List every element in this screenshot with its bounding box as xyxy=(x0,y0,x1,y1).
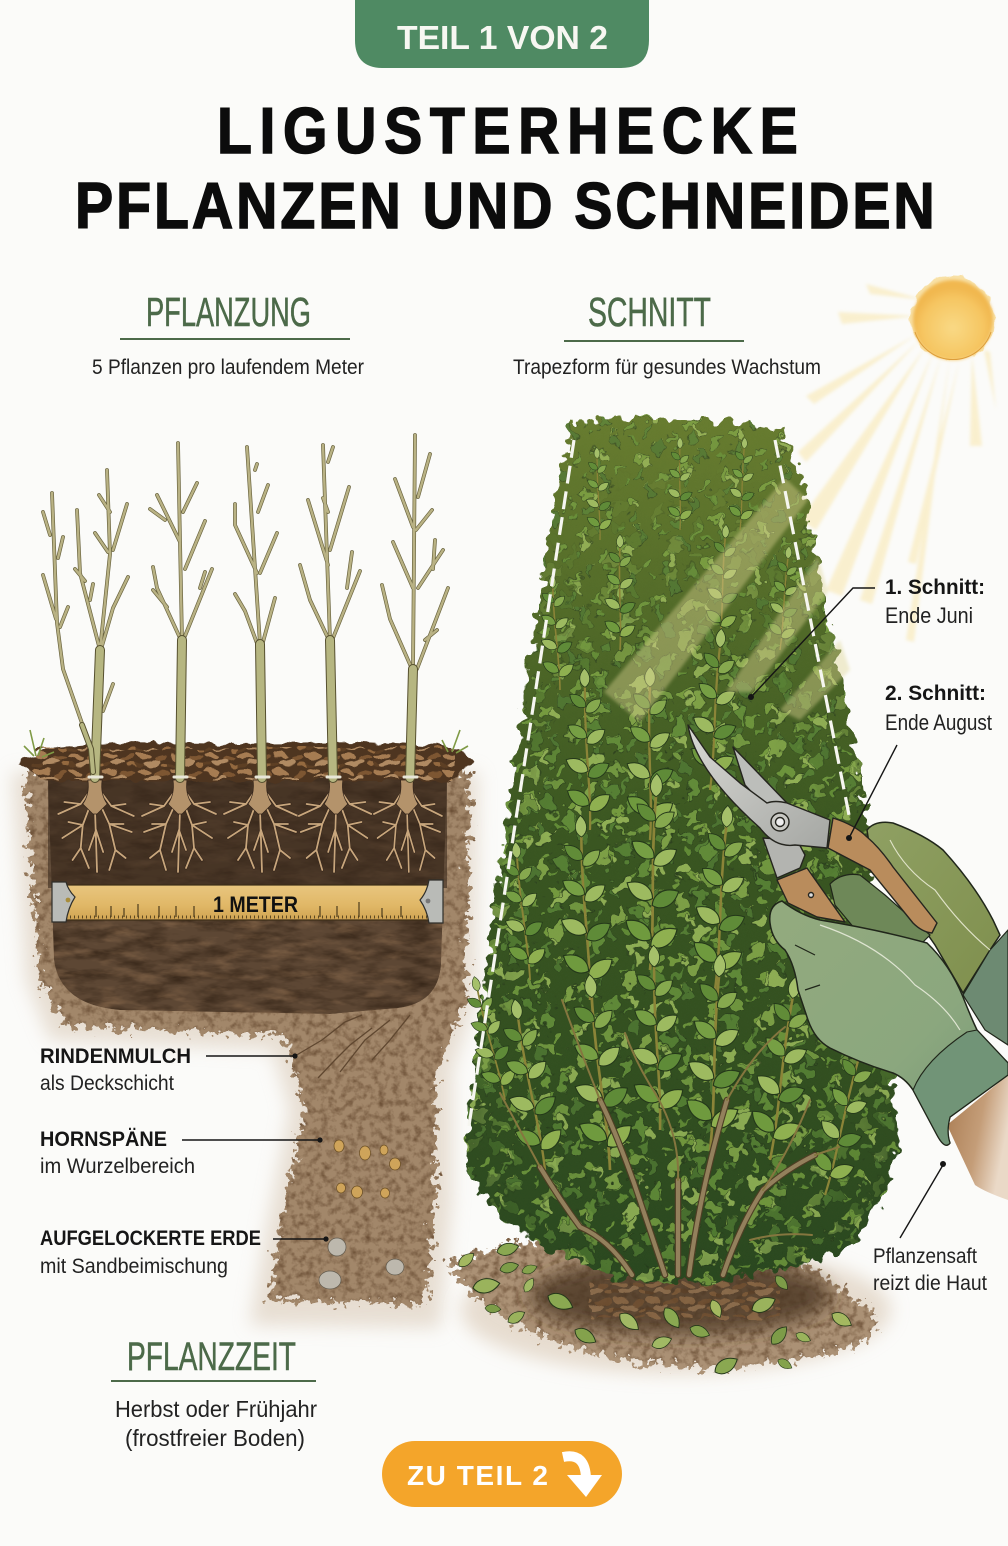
glove cuff and seam xyxy=(795,840,1008,1145)
title xyxy=(75,95,935,242)
roots of five plants xyxy=(58,780,442,872)
ruler: 1 meter xyxy=(52,880,443,923)
pruner xyxy=(688,725,937,933)
icon: sun with rays xyxy=(798,276,996,642)
callout: 1. Schnitt: Ende Juni xyxy=(885,603,973,628)
heading: Schnitt: SCHNITT xyxy=(588,289,711,335)
callout: 2. Schnitt: Ende August xyxy=(885,710,992,735)
label: Rindenmulch: als Deckschicht xyxy=(40,1072,174,1095)
plants: five bare-root stems xyxy=(43,435,448,778)
label: Hornspäne: HORNSPÄNE xyxy=(40,1128,167,1151)
heading: Pflanzzeit: PFLANZZEIT xyxy=(127,1335,296,1379)
callout: 2. Schnitt: 2. Schnitt: xyxy=(885,682,986,705)
hedge main branches xyxy=(500,1000,839,1275)
heading: Pflanzzeit: (frostfreier Boden) xyxy=(125,1425,305,1451)
label: Aufgelockerte Erde: mit Sandbeimischung xyxy=(40,1255,228,1278)
callout: 1. Schnitt: 1. Schnitt: xyxy=(885,576,985,599)
icon: curved arrow xyxy=(563,1456,602,1497)
panel: trench and planting section xyxy=(12,435,478,1328)
button: Zu Teil 2 xyxy=(382,1441,622,1507)
label: Aufgelockerte Erde xyxy=(40,1227,329,1278)
heading: Pflanzung: 5 Pflanzen pro laufendem Meter xyxy=(92,356,364,379)
label: Hornspäne xyxy=(40,1128,323,1178)
back glove cuff xyxy=(963,930,1008,1045)
callout: Pflanzensaft: reizt die Haut xyxy=(873,1272,987,1295)
button: Zu Teil 2: ZU TEIL 2 xyxy=(407,1460,548,1491)
sunlight beams across foliage xyxy=(604,478,850,722)
callout: 2. Schnitt xyxy=(846,682,992,841)
heading: Pflanzzeit xyxy=(111,1335,317,1451)
label: Rindenmulch xyxy=(40,1045,298,1095)
title: LIGUSTERHECKE xyxy=(217,95,798,167)
leaf sprigs xyxy=(455,437,888,1201)
icon: grass tufts xyxy=(24,730,468,757)
mulch layer xyxy=(18,742,476,781)
banner: Teil 1 von 2 xyxy=(355,0,649,68)
soil surround with lower tail xyxy=(24,772,470,1305)
inner finger xyxy=(830,874,930,945)
hand with glove holding pruner xyxy=(688,725,1008,1200)
callout: Pflanzensaft: Pflanzensaft xyxy=(873,1245,977,1268)
heading: Pflanzzeit: Herbst oder Frühjahr xyxy=(115,1396,317,1422)
dark planting soil xyxy=(48,778,447,1014)
tail: loose roots, horn shavings and pebbles xyxy=(295,1015,410,1289)
heading: Schnitt: Trapezform für gesundes Wachstum xyxy=(513,356,821,379)
back glove xyxy=(867,822,1000,993)
callout: Pflanzensaft xyxy=(873,1161,987,1295)
hedge foliage mass xyxy=(466,418,899,1284)
heading: Schnitt xyxy=(513,289,821,379)
label: Rindenmulch: RINDENMULCH xyxy=(40,1045,191,1068)
hedge: trapezoid-cut privet xyxy=(455,418,899,1284)
callout: 1. Schnitt xyxy=(748,576,985,700)
banner: Teil 1 von 2: TEIL 1 VON 2 xyxy=(397,19,608,56)
front glove xyxy=(770,901,1008,1145)
heading: Pflanzung: PFLANZUNG xyxy=(146,289,311,335)
label: Aufgelockerte Erde: AUFGELOCKERTE ERDE xyxy=(40,1227,261,1250)
trapezoid dashed guide lines xyxy=(468,440,850,1132)
arm xyxy=(947,1075,1008,1200)
ground with mulch and fallen leaves xyxy=(448,1238,891,1378)
title: PFLANZEN UND SCHNEIDEN xyxy=(75,170,935,242)
pale halo of the soil xyxy=(12,772,478,1328)
ruler: 1 meter: 1 METER xyxy=(213,892,298,917)
label: Hornspäne: im Wurzelbereich xyxy=(40,1155,195,1178)
heading: Pflanzung xyxy=(92,289,364,379)
